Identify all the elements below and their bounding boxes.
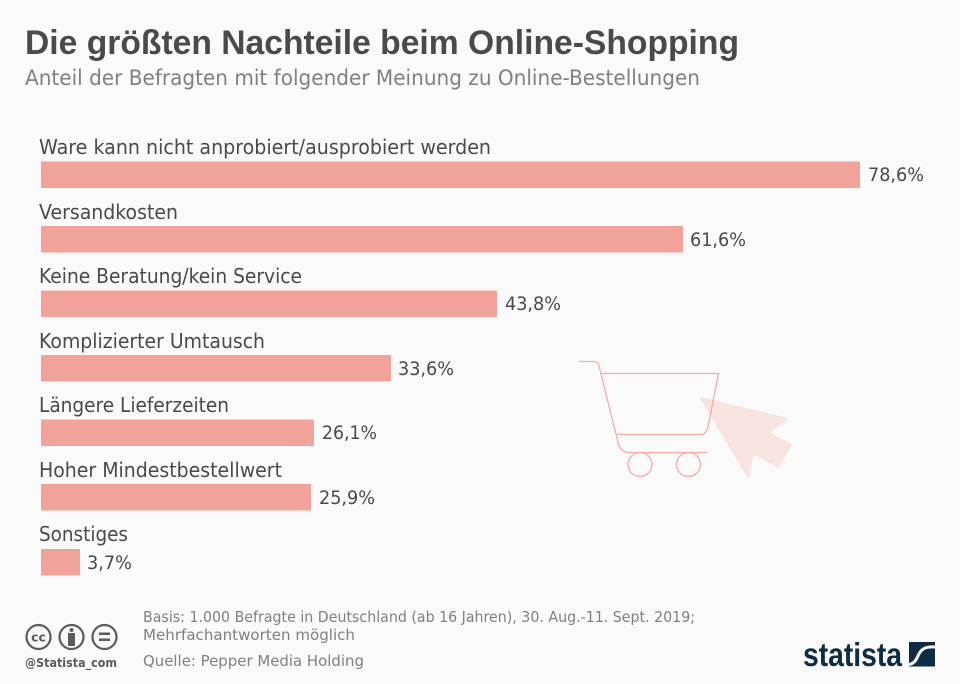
icon: shopping cart [579,362,718,476]
bar row: Sonstiges [39,522,132,576]
bar row: Komplizierter Umtausch: 33,6% [398,358,454,380]
bar row: Längere Lieferzeiten: 26,1% [322,422,377,444]
bar row: Ware kann nicht anprobiert: Ware kann nicht anprobiert/ausprobiert werden [39,135,491,159]
source note: Basis: 1.000 Befragte in Deutschland (ab 16 Jahren), 30. Aug.-11. Sept. 2019; [143,608,695,626]
bar chart [39,135,924,576]
source note [143,608,695,670]
bar row: Ware kann nicht anprobiert [39,135,924,188]
bar row: Komplizierter Umtausch [39,329,454,382]
bar row: Sonstiges: Sonstiges [39,522,128,546]
title: Die größten Nachteile beim Online-Shopping [25,24,739,62]
icon: mouse cursor [702,398,791,476]
icon: statista mark [909,642,935,666]
icon: no derivatives [92,625,116,649]
bar row: Versandkosten: Versandkosten [39,200,178,224]
bar row: Keine Beratung: 43,8% [505,293,561,315]
subtitle: Anteil der Befragten mit folgender Meinung zu Online-Bestellungen [25,66,700,90]
bar row: Hoher Mindestbestellwert: 25,9% [319,487,375,509]
statista handle: @Statista_com [25,656,117,671]
icon: cc: cc [31,630,46,644]
source note: Quelle: Pepper Media Holding [143,652,364,670]
bar row: Komplizierter Umtausch: Komplizierter Umtausch [39,329,265,353]
bar row: Keine Beratung: Keine Beratung/kein Service [39,264,302,288]
bar row: Keine Beratung [39,264,561,317]
statista logo: statista [803,636,903,673]
icon: creative commons licence [26,625,116,649]
bar row: Versandkosten: 61,6% [690,229,746,251]
bar row: Hoher Mindestbestellwert: Hoher Mindestbestellwert [39,458,282,482]
bar row: Ware kann nicht anprobiert: 78,6% [868,164,924,186]
icon: attribution [60,625,84,649]
bar row: Längere Lieferzeiten: Längere Lieferzeiten [39,393,229,417]
source note: Mehrfachantworten möglich [143,626,355,644]
bar row: Versandkosten [39,200,746,252]
bar row: Sonstiges: 3,7% [87,552,132,574]
bar row: Längere Lieferzeiten [39,393,377,446]
bar row: Hoher Mindestbestellwert [39,458,375,510]
